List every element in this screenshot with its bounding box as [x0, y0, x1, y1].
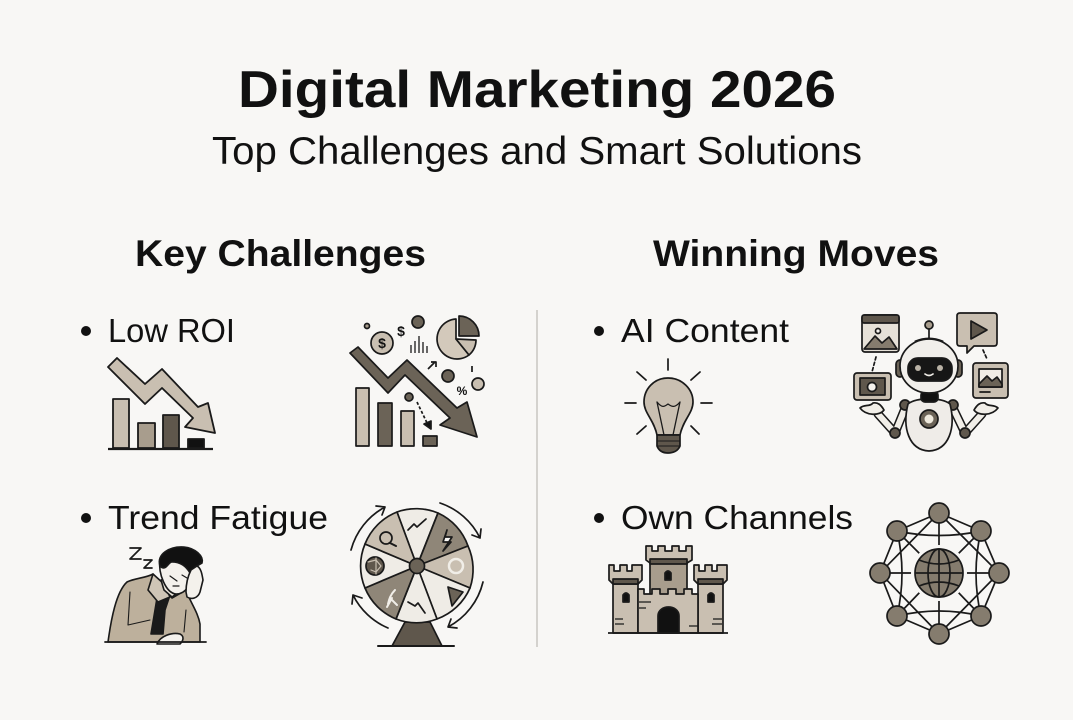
- heading: winning moves: Winning Moves: [653, 233, 939, 274]
- item: Own Channels label: Own Channels: [621, 499, 853, 536]
- icon: falling chart detailed: [350, 316, 484, 446]
- infographic: %: [457, 384, 468, 398]
- wheel base: [378, 622, 454, 646]
- item: Trend Fatigue label: Trend Fatigue: [108, 499, 328, 536]
- icon: tired man at desk: [105, 547, 206, 644]
- icon: network globe: [870, 503, 1009, 644]
- icon: falling bar chart small: [108, 358, 215, 449]
- item: Low ROI label: Low ROI: [108, 312, 235, 349]
- infographic: $: [378, 335, 386, 351]
- media card: camera: [854, 373, 891, 400]
- icon: spinning trend wheel: [351, 503, 483, 646]
- icon: robot with media cards: [854, 313, 1008, 451]
- subtitle: Top Challenges and Smart Solutions: [212, 130, 862, 173]
- title: Digital Marketing 2026: [238, 61, 836, 119]
- heading: key challenges: Key Challenges: [135, 233, 426, 274]
- wheel segments: [361, 509, 473, 623]
- rotation arrows: [351, 503, 483, 628]
- infographic: $: [397, 323, 405, 339]
- media card: play bubble: [957, 313, 997, 353]
- media card: image window: [862, 315, 899, 352]
- media card: picture: [973, 363, 1008, 398]
- icon: lightbulb: [625, 359, 712, 453]
- item: AI Content label: AI Content: [621, 312, 789, 349]
- icon: castle: [608, 546, 728, 633]
